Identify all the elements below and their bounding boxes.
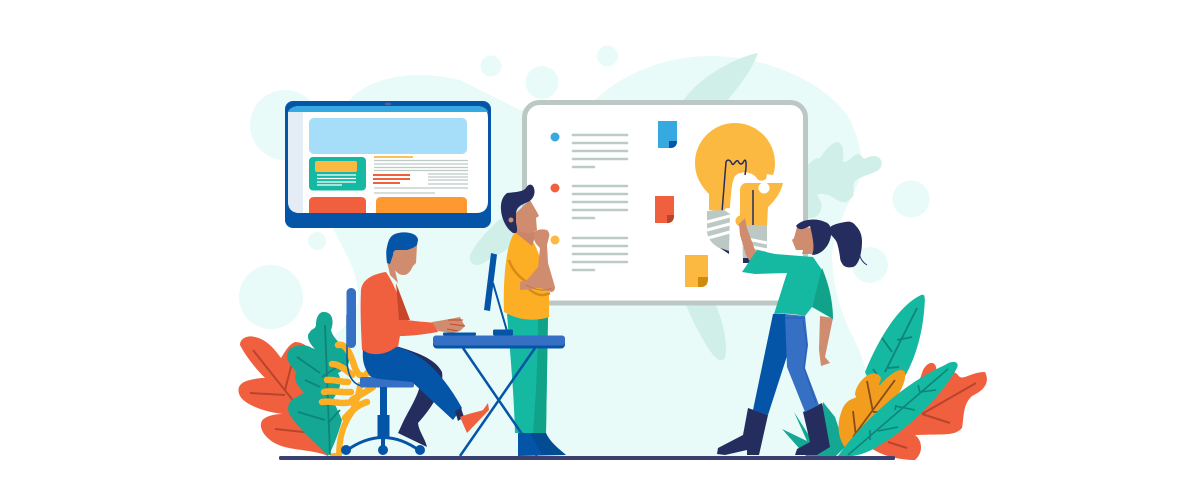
rear leg [396,346,442,447]
neck [515,222,534,246]
sticky note yellow [685,255,708,287]
floor line [279,456,895,460]
shirt [504,232,549,320]
pale background leaves [470,53,882,360]
trousers [753,314,787,415]
screen [288,106,488,213]
filament [722,160,753,229]
trousers [507,314,548,433]
monitor [285,101,491,228]
text column [373,157,468,193]
background blob [239,46,930,456]
keyboard [443,332,476,336]
hair and ponytail [796,219,862,267]
raised hand [739,218,758,265]
orange block [376,197,467,213]
shirt [742,250,822,316]
light bulb [695,123,783,263]
left boot [717,408,768,455]
right plant: back teal leaf [865,295,925,405]
front leg [363,347,462,420]
hair [501,185,535,233]
sock and shoe [455,408,464,421]
bulb base [707,210,730,252]
desk monitor [484,253,513,336]
teal card [309,157,366,190]
chair [341,288,425,455]
whiteboard [524,102,806,303]
man seated at desk [341,232,489,455]
right plant: front teal leaf [838,362,958,457]
red block [309,197,366,213]
bulb right half [740,183,783,226]
left plant: yellow plant [322,345,373,456]
right plant: orange leaf [839,370,905,450]
sticky note red [655,196,674,223]
right boot [795,403,830,455]
right plant: red leaf [871,363,987,460]
head [516,200,539,233]
head and neck [387,240,417,283]
sticky note blue [658,121,677,148]
left arm [819,316,833,366]
hero banner [309,118,467,154]
shoes [518,433,566,456]
arm and hand on chin [520,229,555,292]
face and neck [792,227,815,254]
woman [717,218,867,455]
torso and arm [361,272,438,356]
desk [433,253,565,456]
right plant: dark grass [782,402,845,456]
hand [432,317,465,333]
standing man [501,185,566,456]
left plant: green leaf [287,312,349,456]
left plant: red leaf [238,336,328,456]
bullet list [550,132,627,270]
hair [386,232,418,264]
bulb left half [695,123,775,212]
